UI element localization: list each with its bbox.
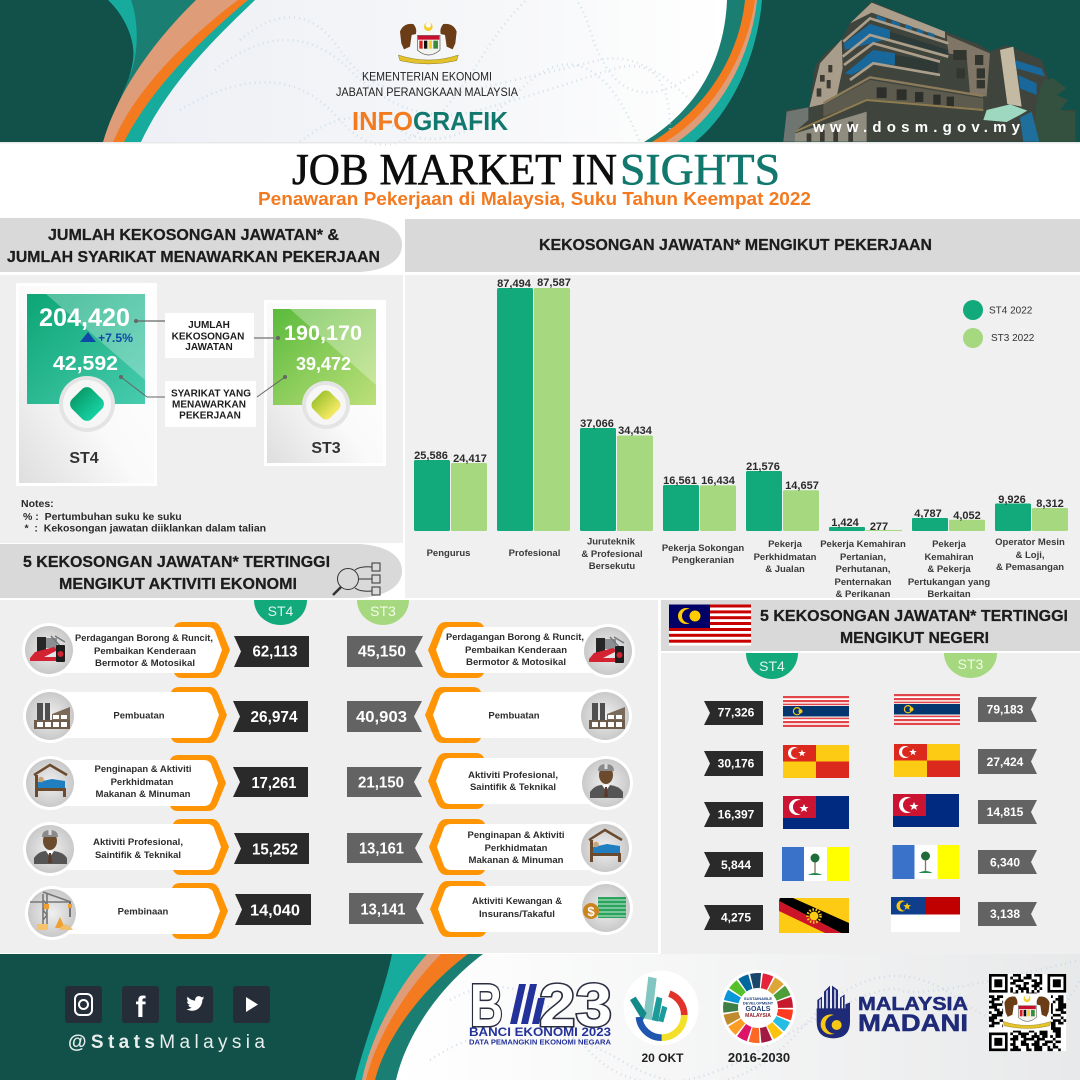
ST3 row 1: 45,150 [358, 644, 406, 660]
tab: ST3 [944, 653, 997, 678]
callout: vacancies: KEKOSONGAN [172, 332, 244, 342]
logo: Banci Ekonomi 2023: DATA PEMANGKIN EKONOMI NEGARA [469, 1038, 612, 1046]
ST3 row 3 [347, 753, 633, 810]
category labels: Juruteknik [587, 536, 636, 548]
logo: SDG wheel: MALAYSIA [745, 1013, 771, 1019]
ministry name: JABATAN PERANGKAAN MALAYSIA [336, 87, 518, 99]
ST3 row 1: Bermotor & Motosikal [466, 657, 566, 668]
bar values: 8,312 [1036, 498, 1064, 510]
title: JOB MARKET IN [292, 145, 617, 194]
ST4 figures: 42,592 [53, 353, 118, 375]
bar values: 25,586 [414, 450, 448, 462]
ministry name [336, 72, 518, 99]
ST4 row 2: Pembuatan [113, 710, 165, 722]
category labels: & Jualan [765, 564, 805, 575]
ST4 values: 5,844 [721, 858, 751, 872]
category labels: Operator Mesin [995, 537, 1065, 548]
logo: Banci Ekonomi 2023: B [470, 972, 503, 1039]
bar values: 34,434 [618, 425, 653, 437]
bar values [414, 277, 1064, 533]
QR code [989, 974, 1066, 1051]
bar values: 14,657 [785, 480, 819, 492]
ST4 values: 30,176 [718, 756, 755, 770]
ST4 row 4: 15,252 [252, 842, 298, 858]
title: SIGHTS [620, 145, 780, 194]
category labels: Pengkeranian [672, 555, 734, 566]
footer band [0, 954, 1080, 1080]
tab: ST4 [254, 600, 307, 625]
ST4 row 4: Saintifik & Teknikal [95, 850, 181, 861]
category labels: Pengurus [427, 548, 470, 559]
logo: SDG wheel: 2016-2030 [728, 1050, 790, 1065]
bar values: 4,052 [953, 510, 981, 522]
ST4 row 3 [23, 755, 308, 811]
ST4 row 3: Penginapan & Aktiviti [94, 764, 192, 775]
category labels [427, 536, 1065, 600]
category labels: Perhutanan, [836, 564, 890, 575]
notes: Notes: [21, 498, 54, 510]
logo: Malaysia Madani: MADANI [858, 1010, 968, 1037]
ST4 row 2 [23, 687, 308, 743]
callout: companies: PEKERJAAN [179, 410, 241, 422]
ST4 row 5: 14,040 [250, 902, 300, 920]
ST4 row 5: Pembinaan [118, 906, 169, 918]
ST4 row 5 [25, 883, 311, 940]
category labels: Pekerja Kemahiran [820, 539, 906, 550]
logo: Malaysia Madani: MALAYSIA [858, 994, 968, 1014]
icon: magnifier with checklist [333, 563, 380, 595]
category labels: Pekerja Sokongan [662, 543, 744, 554]
logo: Banci Ekonomi 2023: BANCI EKONOMI 2023 [469, 1025, 611, 1039]
ST3 row 2: Pembuatan [488, 710, 540, 722]
heading: vacancies by occupation: KEKOSONGAN JAWATAN* MENGIKUT PEKERJAAN [539, 237, 932, 254]
ST4 row 3: Makanan & Minuman [96, 789, 191, 800]
icon: instagram [75, 994, 92, 1015]
icon: youtube play [246, 997, 258, 1012]
bars: ST4 [414, 288, 1031, 531]
legend [963, 300, 1035, 348]
social handle: @StatsMalaysia [68, 1032, 265, 1053]
tab: ST4 [746, 653, 798, 679]
ST3 values: 79,183 [987, 702, 1024, 716]
bar values: 37,066 [580, 418, 614, 430]
ST3 figures: 39,472 [296, 354, 351, 374]
heading: top 5 by economic activity [0, 544, 402, 598]
bar values: 87,587 [537, 277, 571, 289]
category labels: Kemahiran [924, 552, 974, 563]
tab: ST3 [357, 600, 409, 625]
ST3 values: 27,424 [987, 755, 1024, 769]
callout: companies: SYARIKAT YANG [171, 388, 251, 400]
ST3 row 4 [347, 819, 632, 875]
building illustration [783, 2, 1076, 142]
ST3 values: 6,340 [990, 856, 1020, 870]
category labels: Pekerja [932, 539, 967, 550]
legend: ST3 2022 [991, 333, 1035, 344]
header banner [0, 0, 1080, 144]
bars: ST3 [451, 288, 1068, 531]
ST4 row 1: Perdagangan Borong & Runcit, [75, 633, 213, 644]
category labels: & Pekerja [927, 564, 971, 575]
icon: twitter [186, 996, 204, 1011]
tab: ST3: ST3 [370, 603, 396, 619]
ST4 row 3: Perkhidmatan [111, 777, 174, 788]
ST4 row 1: 62,113 [252, 644, 298, 660]
category labels: Pertanian, [840, 552, 886, 563]
bar values: 4,787 [914, 508, 942, 520]
card: ST4: ST4 [69, 450, 99, 467]
ST3 row 3: Saintifik & Teknikal [470, 782, 556, 793]
ST3 row 3: Aktiviti Profesional, [468, 770, 558, 781]
ST4 values: 4,275 [721, 910, 751, 924]
bar values: 9,926 [998, 494, 1026, 506]
infografik label: GRAFIK [413, 106, 508, 136]
logo: Banci Ekonomi 2023 [469, 972, 612, 1046]
logo: Malaysia Madani [817, 986, 968, 1038]
panel: totals [0, 275, 403, 543]
logo: SDG wheel: GOALS [746, 1006, 771, 1013]
crest: Jata Negara [398, 22, 458, 64]
ST4 figures: +7.5% [98, 331, 133, 345]
website: www.dosm.gov.my [812, 119, 1021, 136]
category labels: Berkaitan [927, 589, 971, 600]
category labels: & Pemasangan [996, 562, 1064, 573]
bar values: 16,434 [701, 475, 736, 487]
notes: * : Kekosongan jawatan diiklankan dalam talian [24, 522, 266, 534]
icon: Malaysian flag [669, 604, 751, 646]
ministry name: KEMENTERIAN EKONOMI [362, 72, 492, 84]
ST4 row 4 [23, 819, 309, 876]
heading: top 5 by state [661, 600, 1080, 651]
ST4 row 3: 17,261 [252, 775, 297, 792]
icon: facebook: f [136, 991, 146, 1024]
card: ST4 [16, 283, 157, 486]
ST3 figures [284, 322, 362, 374]
heading: top 5 by state: 5 KEKOSONGAN JAWATAN* TERTINGGI [760, 608, 1068, 625]
category labels: Perkhidmatan [754, 552, 817, 563]
ST3 row 2 [347, 687, 632, 743]
category labels: Bersekutu [589, 561, 635, 572]
bar values: 24,417 [453, 453, 487, 465]
bar values: 21,576 [746, 461, 780, 473]
tab: ST4: ST4 [268, 603, 294, 619]
ST3 values [978, 697, 1037, 926]
ST3 values: 14,815 [987, 805, 1024, 819]
ST3 row 2: 40,903 [356, 709, 407, 726]
ST4 row 2: 26,974 [250, 709, 298, 726]
category labels: Profesional [509, 548, 560, 559]
ST3 row 4: 13,161 [359, 840, 404, 858]
ST4 row 1 [22, 622, 309, 678]
tab: ST4: ST4 [759, 658, 785, 674]
ST4 values: 77,326 [718, 706, 755, 720]
connector lines [119, 319, 287, 397]
title [292, 145, 780, 194]
tab: ST3: ST3 [958, 656, 984, 672]
card: ST3 [264, 300, 386, 466]
ST4 figures [39, 304, 133, 375]
heading: total vacancies: JUMLAH KEKOSONGAN JAWATAN* & [48, 227, 339, 244]
panel: top 5 states [661, 653, 1080, 954]
panel: top 5 economic activity [0, 600, 658, 953]
legend: ST4 2022 [989, 306, 1033, 316]
callout: companies: MENAWARKAN [172, 400, 246, 410]
heading: top 5 by state: MENGIKUT NEGERI [840, 630, 989, 647]
ST3 flags [891, 694, 960, 932]
infografik label [352, 106, 508, 136]
notes [21, 498, 266, 534]
ST3 row 3: 21,150 [358, 774, 404, 792]
callout: vacancies: JAWATAN [185, 342, 233, 353]
card: ST3: ST3 [311, 440, 341, 457]
ST4 row 1: Pembaikan Kenderaan [94, 646, 196, 657]
social icons [65, 986, 270, 1024]
heading: top 5 by economic activity: MENGIKUT AKTIVITI EKONOMI [59, 576, 297, 593]
ST3 row 5: 13,141 [360, 902, 406, 918]
ST3 figures: 190,170 [284, 322, 362, 345]
ST4 row 1: Bermotor & Motosikal [95, 658, 195, 669]
logo: Hari Statistik 20 Okt [624, 970, 698, 1065]
logo: Banci Ekonomi 2023: 23 [539, 972, 612, 1039]
bar values: 87,494 [497, 278, 532, 290]
ST3 row 1: Perdagangan Borong & Runcit, [446, 632, 584, 643]
ST3 row 1: Pembaikan Kenderaan [465, 645, 567, 656]
bar values: 277 [870, 521, 888, 533]
heading: top 5 by economic activity: 5 KEKOSONGAN JAWATAN* TERTINGGI [23, 554, 330, 571]
infografik label: INFO [352, 106, 413, 136]
category labels: & Profesional [581, 549, 643, 560]
logo: SDG wheel [719, 969, 797, 1065]
callout: vacancies [165, 313, 254, 358]
callout: vacancies: JUMLAH [188, 320, 230, 331]
ST3 row 4: Perkhidmatan [485, 843, 548, 854]
category labels: & Loji, [1015, 550, 1045, 561]
logo: SDG wheel: DEVELOPMENT [743, 1000, 774, 1006]
category labels: Pekerja [768, 539, 803, 550]
ST4 values: 16,397 [718, 808, 755, 822]
heading: total vacancies: JUMLAH SYARIKAT MENAWARKAN PEKERJAAN [7, 249, 380, 266]
logo: SDG wheel: SUSTAINABLE [744, 996, 772, 1001]
subtitle: Penawaran Pekerjaan di Malaysia, Suku Tahun Keempat 2022 [258, 189, 811, 209]
ST4 flags [779, 696, 849, 933]
ST4 row 4: Aktiviti Profesional, [93, 837, 183, 848]
bar values: 16,561 [663, 475, 697, 487]
bar values: 1,424 [831, 517, 860, 529]
ST4 values [704, 701, 763, 930]
callout: companies [165, 381, 256, 427]
ST3 row 4: Makanan & Minuman [468, 855, 564, 866]
panel: occupation bar chart [405, 275, 1080, 600]
heading: total vacancies [0, 218, 402, 272]
ST3 row 5: Aktiviti Kewangan & [472, 896, 562, 907]
heading: vacancies by occupation [405, 219, 1080, 272]
ST3 row 5: Insurans/Takaful [479, 909, 555, 920]
notes: % : Pertumbuhan suku ke suku [23, 511, 182, 523]
ST3 row 4: Penginapan & Aktiviti [468, 830, 564, 841]
logo: Hari Statistik 20 Okt: 20 OKT [641, 1051, 684, 1065]
category labels: Penternakan [834, 577, 892, 588]
ST3 row 1 [347, 622, 635, 678]
category labels: Pertukangan yang [908, 577, 990, 588]
category labels: & Perikanan [836, 589, 891, 600]
ST3 values: 3,138 [990, 907, 1020, 921]
ST3 row 5 [349, 881, 633, 937]
ST4 figures: 204,420 [39, 304, 130, 332]
